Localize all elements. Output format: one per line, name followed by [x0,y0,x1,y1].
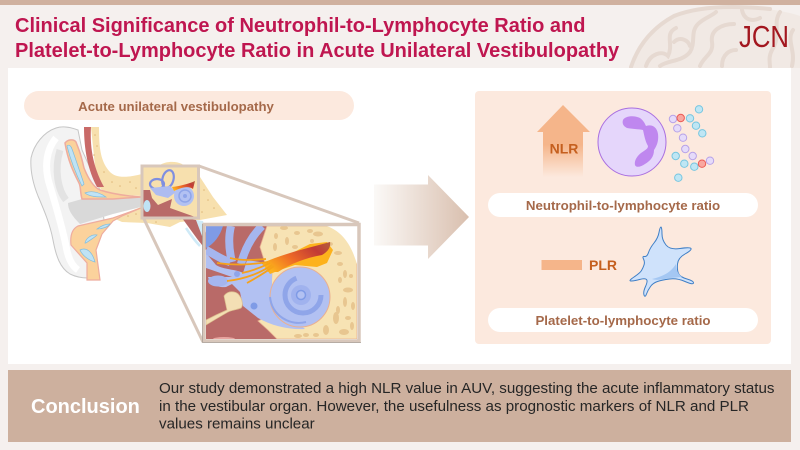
conclusion text: in the vestibular organ. However, the usefulness as prognostic markers of NLR and PLR [159,398,749,415]
panel: NLR and PLR [475,91,771,344]
ear canal [68,196,141,224]
small inner ear detail [143,167,198,218]
label pill: platelet-to-lymphocyte ratio [488,308,758,332]
icon: granule particles [669,106,714,181]
white corner outside bone [327,226,357,264]
temporal bone [91,127,227,227]
small nerve [172,181,195,191]
outer ear [31,127,104,278]
nerve branches [217,258,274,283]
nerve base [262,242,333,274]
small cochlea [174,186,194,206]
PLR flat bar [542,257,617,273]
inset frame [204,224,359,341]
conclusion heading: Conclusion [31,396,140,418]
title: Platelet-to-Lymphocyte Ratio in Acute Unilateral Vestibulopathy [15,40,620,62]
vestibule [206,253,305,329]
conclusion text: Our study demonstrated a high NLR value in AUV, suggesting the acute inflammatory status [159,380,775,397]
semicircular canals [206,226,223,248]
title [15,15,620,62]
conclusion text [159,380,775,432]
pale patch at base [213,337,235,339]
small inset frame [142,166,198,218]
conclusion text: values remains unclear [159,416,315,432]
top accent bar [0,0,800,5]
lower cartilage [71,208,141,280]
small middle ear [144,190,194,216]
NLR up arrow: NLR [550,140,578,156]
main white panel [8,68,791,364]
icon: neutrophil cell [598,108,666,176]
journal logo: JCN [739,19,789,54]
label pill: platelet-to-lymphocyte ratio: Platelet-to-lymphocyte ratio [535,313,711,328]
zoom connector lines [143,166,359,342]
ear illustration [31,127,227,280]
nerve fibres [263,242,330,272]
skin layer [84,127,104,187]
PLR flat bar: PLR [589,257,617,273]
eustachian tube [182,218,206,250]
stapes [206,292,242,325]
heading pill: acute unilateral vestibulopathy: Acute unilateral vestibulopathy [78,99,274,114]
bone [258,226,357,339]
NLR up arrow [537,105,590,177]
brain watermark [630,6,800,68]
small semicircular canals [150,169,176,189]
title: Clinical Significance of Neutrophil-to-Lymphocyte Ratio and [15,15,585,37]
icon: platelet [630,227,694,296]
big arrow [374,175,469,259]
bone pores [273,226,355,338]
upper cartilage [65,140,141,199]
conclusion band [8,370,791,442]
label pill: neutrophil-to-lymphocyte ratio [488,193,758,217]
magnified inner ear inset [202,224,361,342]
label pill: neutrophil-to-lymphocyte ratio: Neutrophil-to-lymphocyte ratio [526,198,720,213]
cochlea [270,267,330,327]
heading pill: acute unilateral vestibulopathy [24,91,354,120]
